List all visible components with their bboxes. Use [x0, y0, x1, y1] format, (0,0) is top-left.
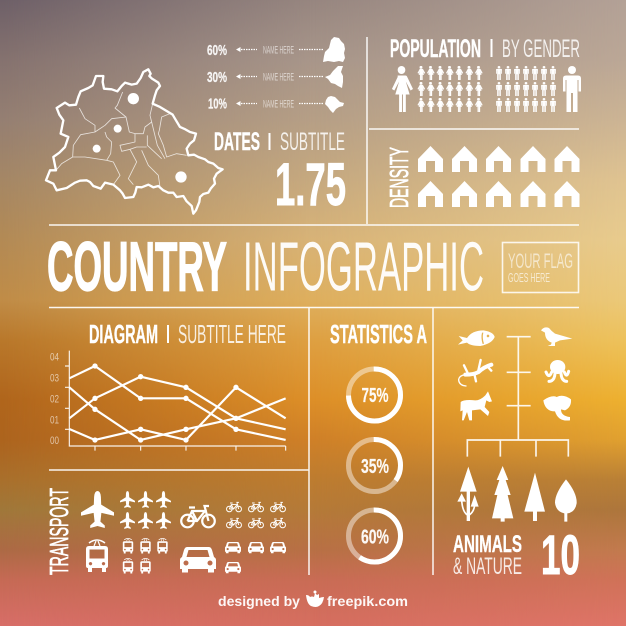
donut: 35%: 35% — [361, 456, 389, 478]
icon: large tram — [86, 540, 108, 572]
density label: DENSITY — [384, 147, 414, 208]
diagram heading: DIAGRAM — [89, 319, 158, 349]
region shares: NAME HERE — [263, 72, 294, 84]
animals and nature label — [453, 531, 522, 580]
icon: small women — [418, 66, 482, 112]
line chart — [50, 351, 286, 451]
region shares: NAME HERE — [263, 44, 294, 56]
connector lines — [467, 337, 568, 457]
region shares: 60% — [207, 43, 227, 59]
icon: elephant — [543, 396, 571, 421]
footer credit: freepik.com — [327, 594, 408, 609]
region shares: NAME HERE — [263, 98, 294, 110]
footer credit — [218, 590, 408, 609]
map regions — [56, 92, 187, 187]
map markers — [93, 93, 187, 183]
data series — [69, 366, 286, 440]
animals and nature label: ANIMALS — [453, 531, 522, 558]
icon: large car — [180, 547, 216, 572]
icon: small bikes — [227, 502, 285, 528]
population heading: POPULATION — [390, 35, 481, 63]
axes — [65, 351, 286, 451]
donut: 75% — [348, 369, 400, 421]
data points — [92, 363, 239, 443]
layout dividers — [49, 37, 579, 575]
icon: small cars — [225, 542, 286, 573]
y axis labels: 02 — [50, 394, 59, 406]
population pictograms — [392, 66, 581, 112]
animals and nature label: & NATURE — [453, 553, 522, 580]
footer credit: designed by — [218, 594, 301, 609]
y axis labels: 01 — [50, 414, 59, 426]
icon: leaf tree — [555, 479, 577, 522]
y axis labels: 00 — [50, 435, 59, 447]
donut: 35% — [348, 440, 400, 492]
icon: woman large — [392, 66, 413, 112]
icon: small planes — [120, 491, 171, 529]
flag placeholder: YOUR FLAG — [508, 250, 573, 273]
donut: 75%: 75% — [362, 385, 389, 407]
dates heading — [214, 128, 345, 156]
animals and nature value: 10 — [541, 523, 580, 586]
icon: lizard — [459, 360, 491, 386]
transport label: TRANSPORT — [44, 488, 74, 575]
flag placeholder — [502, 242, 578, 292]
icon: freepik logo — [306, 590, 324, 607]
dates value: 1.75 — [275, 151, 346, 218]
y axis labels: 03 — [50, 372, 59, 384]
diagram heading — [89, 319, 286, 349]
icon: horse — [460, 391, 492, 420]
icon: man large — [563, 66, 581, 112]
donut: 60% — [348, 510, 400, 562]
region shares: 10% — [208, 96, 227, 112]
density houses — [418, 146, 580, 207]
dates heading: SUBTITLE — [280, 128, 345, 156]
icon: small men — [496, 66, 556, 112]
icon: small trams — [123, 538, 168, 574]
y axis labels: 04 — [50, 352, 59, 364]
y axis labels — [50, 352, 59, 447]
map of the country — [46, 69, 223, 214]
icon: fish — [458, 330, 495, 346]
statistics heading: STATISTICS A — [330, 319, 427, 349]
region shares: 30% — [207, 70, 227, 86]
donut: 60%: 60% — [361, 526, 389, 548]
diagram heading: SUBTITLE HERE — [178, 319, 286, 349]
map outline — [46, 69, 223, 214]
region shares — [207, 37, 345, 113]
icon: conifer — [524, 473, 545, 521]
animals and nature tree diagram — [457, 327, 577, 522]
icon: octopus — [546, 360, 569, 381]
regional silhouettes — [323, 37, 345, 113]
dates heading: DATES — [214, 128, 260, 156]
transport pictograms — [81, 491, 286, 574]
icon: large bike — [181, 506, 215, 527]
icon: branching tree — [457, 467, 479, 521]
icon: large plane — [81, 491, 114, 528]
flag placeholder: GOES HERE — [508, 270, 550, 285]
title: COUNTRY — [47, 228, 227, 306]
icon: fir tree — [492, 466, 513, 522]
icon: bird — [541, 327, 572, 346]
